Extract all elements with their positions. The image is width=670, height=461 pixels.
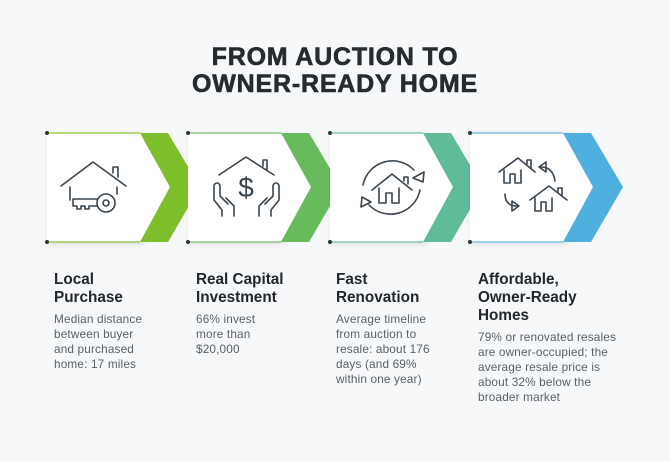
- chevron 1: [45, 131, 200, 244]
- title: [192, 43, 478, 98]
- step 1 text: Local: [54, 271, 94, 288]
- step 1 text: home: 17 miles: [54, 357, 136, 371]
- icon: renovation cycle: [361, 161, 424, 214]
- chevron row: [45, 131, 623, 246]
- step 1 text: [54, 271, 142, 371]
- step 3 text: days (and 69%: [336, 357, 417, 371]
- chevron 3: [328, 131, 483, 244]
- step 2 text: [196, 271, 284, 356]
- chevron 2: [186, 131, 341, 244]
- icon: hands with dollar house: [214, 157, 279, 216]
- step 3 text: Average timeline: [336, 312, 426, 326]
- step 3 text: [336, 271, 430, 386]
- step 4 text: Owner-Ready: [478, 289, 577, 306]
- step 3 text: resale: about 176: [336, 342, 430, 356]
- step 2 text: more than: [196, 327, 250, 341]
- step 1 text: Median distance: [54, 312, 142, 326]
- step 4 text: 79% or renovated resales: [478, 330, 616, 344]
- step 2 text: Investment: [196, 289, 277, 306]
- step 3 text: within one year): [336, 372, 422, 386]
- step 2 text: 66% invest: [196, 312, 255, 326]
- step 4 text: Affordable,: [478, 271, 559, 288]
- step 1 text: and purchased: [54, 342, 134, 356]
- icon: exchange homes: [499, 158, 567, 211]
- step 3 text: Fast: [336, 271, 367, 288]
- step 4 text: [478, 271, 616, 404]
- step 4 text: Homes: [478, 307, 529, 324]
- step 4 text: about 32% below the: [478, 375, 591, 389]
- step 2 text: Real Capital: [196, 271, 284, 288]
- icon: house with key: [61, 162, 126, 212]
- step 4 text: broader market: [478, 390, 560, 404]
- title: FROM AUCTION TO: [212, 43, 458, 71]
- step 1 text: Purchase: [54, 289, 123, 306]
- step 1 text: between buyer: [54, 327, 133, 341]
- step 4 text: are owner-occupied; the: [478, 345, 608, 359]
- step 3 text: from auction to: [336, 327, 416, 341]
- icon: hands with dollar house: $: [238, 172, 254, 203]
- step 4 text: average resale price is: [478, 360, 600, 374]
- title: OWNER-READY HOME: [192, 70, 478, 98]
- chevron 4: [468, 131, 623, 244]
- step 3 text: Renovation: [336, 289, 419, 306]
- step 2 text: $20,000: [196, 342, 240, 356]
